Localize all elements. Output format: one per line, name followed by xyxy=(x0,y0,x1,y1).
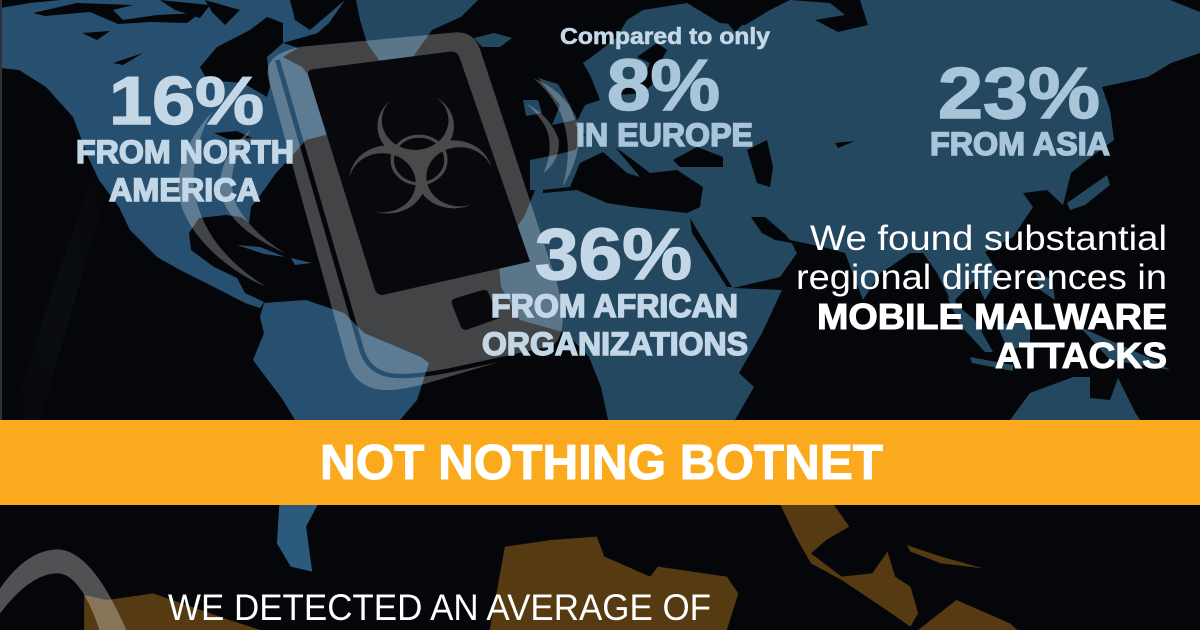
arc: phone wave fragment xyxy=(0,549,126,630)
map: Southeast Asian islands xyxy=(947,270,1170,371)
stat: North America xyxy=(76,63,294,208)
stat: Africa xyxy=(482,215,748,362)
map: orange Central America xyxy=(780,505,918,627)
map: blue Baja fragment xyxy=(277,505,318,572)
stat: Africa: FROM AFRICAN xyxy=(491,288,738,324)
map: South America xyxy=(253,300,429,420)
stat: Europe: 8% xyxy=(607,46,720,126)
stat: Europe xyxy=(560,23,770,153)
light streak xyxy=(10,180,110,420)
stat: North America: AMERICA xyxy=(109,172,260,208)
lower heading: WE DETECTED AN AVERAGE OF xyxy=(168,587,711,628)
stat: Europe: IN EUROPE xyxy=(576,117,753,153)
stat: Asia: FROM ASIA xyxy=(930,126,1110,162)
stat: Asia xyxy=(930,54,1110,162)
stat: Europe: Compared to only xyxy=(560,23,770,49)
banner: NOT NOTHING BOTNET xyxy=(320,436,883,490)
stat: North America: 16% xyxy=(109,63,264,139)
callout: regional differences xyxy=(796,219,1167,376)
map: orange South America xyxy=(918,600,1018,630)
callout: regional differences: MOBILE MALWARE xyxy=(817,296,1167,337)
signal waves left xyxy=(178,112,285,287)
callout: regional differences: ATTACKS xyxy=(995,335,1167,376)
map: orange Caribbean islands xyxy=(907,545,983,568)
left edge strip xyxy=(0,0,2,420)
phone button xyxy=(451,290,499,330)
map: North America xyxy=(0,0,346,308)
map: Japan xyxy=(1067,175,1110,210)
map: orange central landmass xyxy=(490,537,738,630)
map: Caribbean islands xyxy=(237,245,312,265)
map: orange left landmass xyxy=(84,593,260,630)
stat: Africa: ORGANIZATIONS xyxy=(482,326,748,362)
map: Afro-Eurasia landmass xyxy=(499,0,1200,420)
stat: North America: FROM NORTH xyxy=(76,134,294,170)
map: Greenland xyxy=(356,0,478,71)
stat: Africa: 36% xyxy=(535,215,692,295)
stat: Asia: 23% xyxy=(938,54,1100,134)
lower map section xyxy=(0,505,1018,630)
callout: regional differences: We found substantial xyxy=(810,219,1167,258)
callout: regional differences: regional differences in xyxy=(796,258,1167,297)
phone body xyxy=(268,32,563,390)
map: Australia xyxy=(1010,377,1140,420)
map: Iceland xyxy=(474,33,512,47)
banner xyxy=(0,420,1200,505)
signal waves right xyxy=(526,78,579,187)
phone screen xyxy=(308,52,530,295)
map: dark seas and lakes xyxy=(33,0,1030,395)
phone icon xyxy=(178,32,579,390)
biohazard symbol xyxy=(341,96,498,223)
world map: blue upper section xyxy=(0,0,1200,420)
map: British Isles xyxy=(523,78,575,125)
